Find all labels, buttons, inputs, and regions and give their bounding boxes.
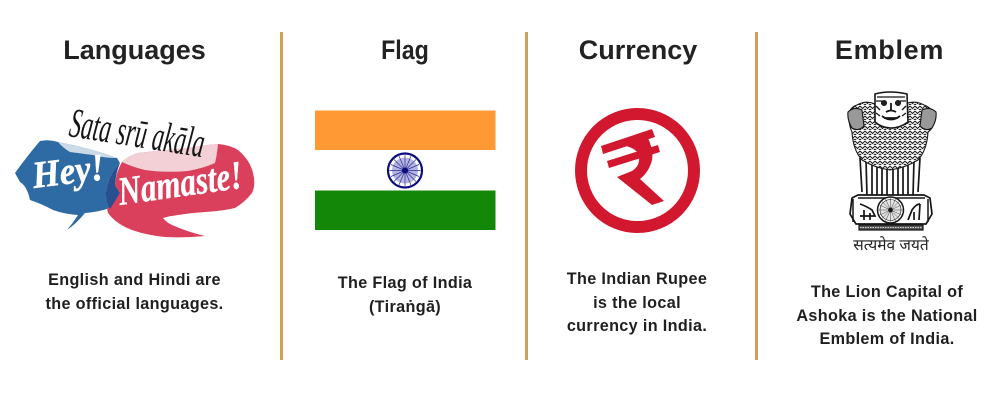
text: currency caption: The Indian Rupee: [567, 270, 707, 288]
text: currency caption: [566, 270, 707, 335]
text: Hey!: Hey!: [29, 146, 107, 197]
text: emblem caption: Emblem of India.: [819, 330, 955, 348]
lion bodies with mane: [849, 102, 935, 170]
text: flag caption: [338, 274, 472, 316]
text: flag caption: The Flag of India: [338, 274, 472, 292]
text: emblem caption: [796, 283, 978, 348]
legs: [860, 158, 920, 196]
text: emblem caption: The Lion Capital of: [811, 283, 963, 301]
abacus with wheel: [850, 195, 932, 230]
heading: Flag: Flag: [381, 34, 429, 64]
heading: Languages: Languages: [63, 34, 206, 64]
side lion faces: [848, 108, 864, 130]
text: languages caption: English and Hindi are: [48, 271, 221, 289]
icon: speech bubbles with greetings: [15, 100, 254, 238]
heading: Emblem: Emblem: [835, 34, 944, 64]
text: flag caption: (Tiraṅgā): [369, 298, 441, 316]
centre lion head: [875, 92, 908, 128]
text: emblem caption: Ashoka is the National: [796, 306, 978, 324]
text: languages caption: the official languages.: [45, 294, 224, 312]
text: currency caption: currency in India.: [567, 317, 707, 335]
heading: Currency: Currency: [579, 34, 697, 64]
emblem motto: सत्यमेव जयते: [853, 236, 930, 254]
text: currency caption: is the local: [593, 294, 681, 312]
text: languages caption: [45, 271, 224, 312]
